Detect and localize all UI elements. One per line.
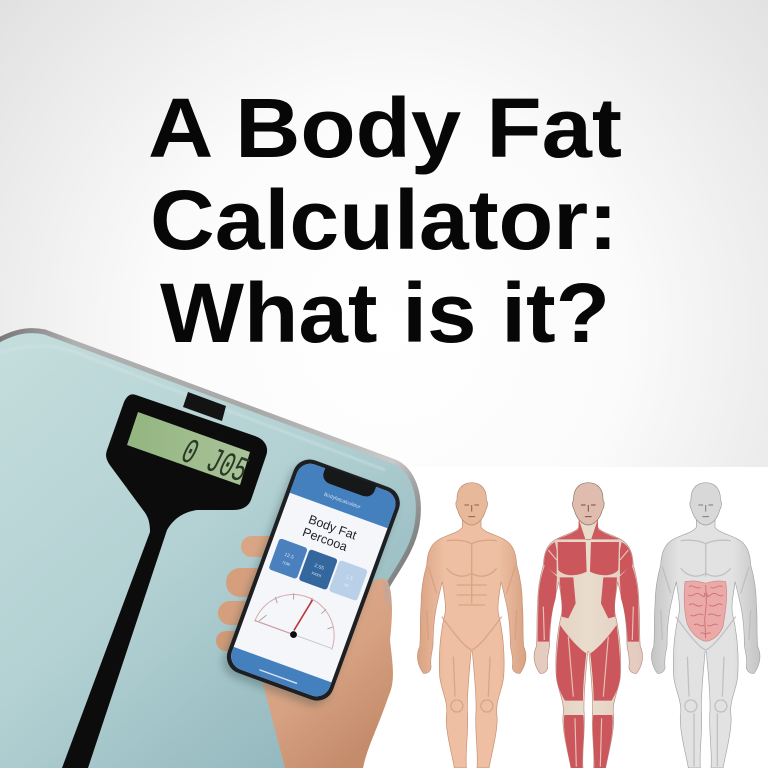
screen heading: Body Fat — [307, 512, 359, 543]
lower right white panel — [0, 467, 768, 768]
title: What is it? — [160, 266, 610, 360]
phone shadow — [218, 460, 401, 710]
hand holding phone — [216, 536, 393, 768]
title: Calculator: — [150, 173, 618, 267]
stat card 1: 12.5 — [283, 552, 295, 561]
stat card 3: 1.5 — [345, 574, 354, 582]
pectoral and shoulder muscles — [538, 542, 639, 768]
gauge needle — [294, 598, 312, 633]
notch — [321, 467, 377, 499]
intestines — [684, 581, 727, 641]
phone screen — [227, 460, 399, 700]
palm and thumb — [262, 579, 393, 768]
stat card 2: xxxx — [311, 570, 323, 579]
arm muscles — [538, 565, 557, 642]
scale display housing and stem — [62, 394, 267, 768]
calf muscles — [564, 715, 584, 768]
skin figure muscle shading — [427, 540, 517, 712]
muscle figure face — [581, 505, 596, 517]
app header title: Bodyfatcalculator — [323, 492, 361, 511]
phone body — [222, 455, 405, 705]
stat card 3 — [329, 560, 368, 601]
obliques — [560, 577, 576, 618]
thumbnail — [383, 582, 391, 604]
screen heading — [301, 512, 359, 556]
title: A Body Fat — [148, 81, 622, 175]
app footer — [227, 647, 331, 700]
LCD reading: 0 J05 — [176, 432, 252, 493]
fingers — [216, 536, 291, 651]
stat card 2 — [298, 549, 338, 590]
stat card 3: xx — [343, 582, 350, 590]
stat card 1: row — [281, 560, 291, 568]
grey figure shading — [661, 540, 751, 767]
bathroom scale — [0, 331, 418, 768]
title — [148, 81, 622, 360]
body figure: muscle — [534, 483, 643, 768]
thigh muscles — [556, 625, 586, 701]
muscle tendons — [543, 550, 633, 767]
stat card 2: 2.55 — [313, 563, 325, 572]
scale strap — [183, 392, 226, 421]
stat card 1 — [268, 538, 308, 579]
body figure: skin — [417, 483, 526, 768]
gauge dial — [254, 582, 346, 652]
grey figure face — [698, 505, 713, 517]
body figure: visceral fat — [651, 483, 760, 768]
skin figure face — [464, 505, 479, 517]
screen heading: Percooa — [301, 525, 349, 554]
gauge hub — [289, 630, 298, 639]
app header — [290, 460, 399, 528]
intestine folds — [688, 585, 723, 638]
home indicator — [259, 669, 297, 684]
smartphone — [218, 454, 405, 711]
LCD screen — [127, 412, 250, 485]
neck muscle — [557, 520, 620, 540]
